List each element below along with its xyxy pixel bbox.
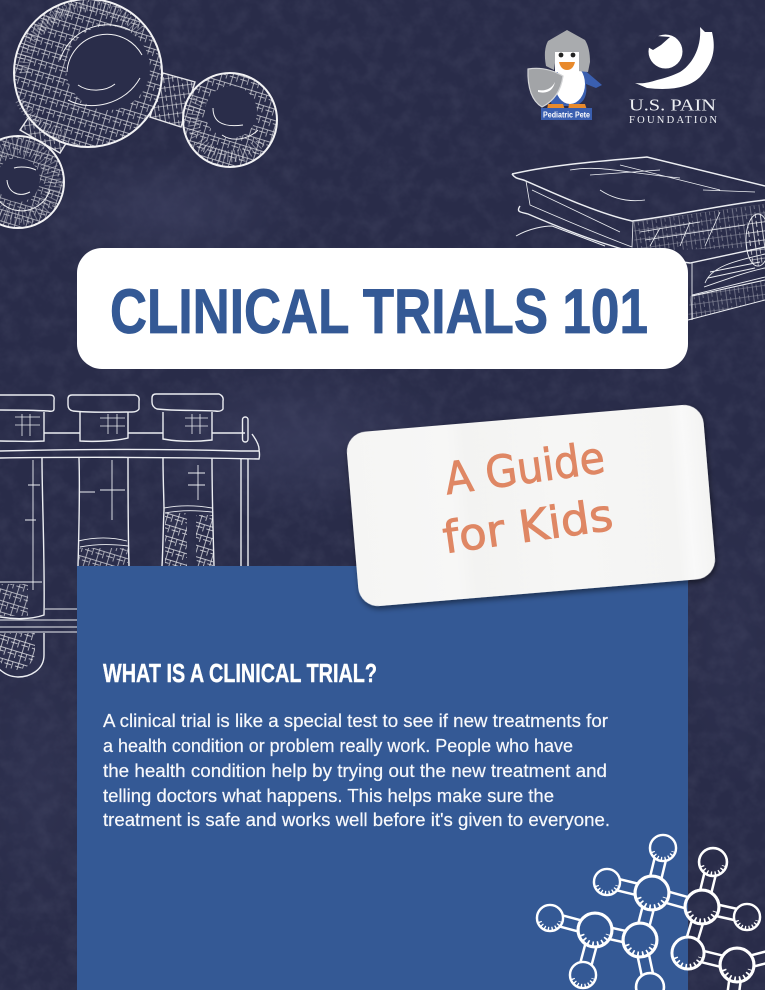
title text: CLINICAL TRIALS 101 [110,277,648,347]
name tag [541,108,592,120]
penguin feet [547,104,587,110]
illustration: test tube rack sketch [0,394,260,677]
rack bars and post [0,417,260,632]
logo text: U.S. PAIN [629,96,716,114]
bonds [560,858,765,990]
sticker text [432,432,616,564]
sticker text: A Guide [441,432,608,505]
illustration: stack of books sketch [512,157,765,320]
panel body text: telling doctors what happens. This helps make sure the [103,785,554,806]
bond hatching [20,73,195,153]
tube left [0,458,44,677]
panel body text: the health condition help by trying out the new treatment and [103,760,607,781]
sticker: a guide for kids [345,403,717,608]
title banner [77,248,688,369]
illustration: bottom-right molecule [537,835,765,990]
panel heading: WHAT IS A CLINICAL TRIAL? [103,658,377,688]
knight helmet [545,30,590,72]
right atom [183,73,277,167]
lower-left atom [0,136,64,228]
top book [512,157,765,250]
penguin face [555,52,579,72]
logo: U.S. Pain Foundation: FOUNDATION [629,115,717,126]
large atom [14,0,162,147]
panel body text [103,710,610,830]
panel body text: treatment is safe and works well before it's given to everyone. [103,809,610,830]
blue content panel [77,566,688,990]
shield [528,68,563,107]
tube right [162,458,214,566]
sticker text: for Kids [440,490,616,564]
middle book [518,206,765,295]
logo mark [648,34,682,68]
penguin flipper and body [548,66,602,106]
atoms [537,835,760,990]
tube middle [78,458,129,566]
logo: Pediatric Pete penguin [528,30,602,120]
illustration: top-left molecule sketch [0,0,277,228]
panel body text: a health condition or problem really work. People who have [103,735,573,756]
bottom book [516,226,765,320]
tube caps and necks [0,394,245,441]
panel body text: A clinical trial is like a special test to see if new treatments for [103,710,608,731]
logo: Pediatric Pete penguin: Pediatric Pete [543,110,590,120]
logo: U.S. Pain Foundation [629,27,717,126]
